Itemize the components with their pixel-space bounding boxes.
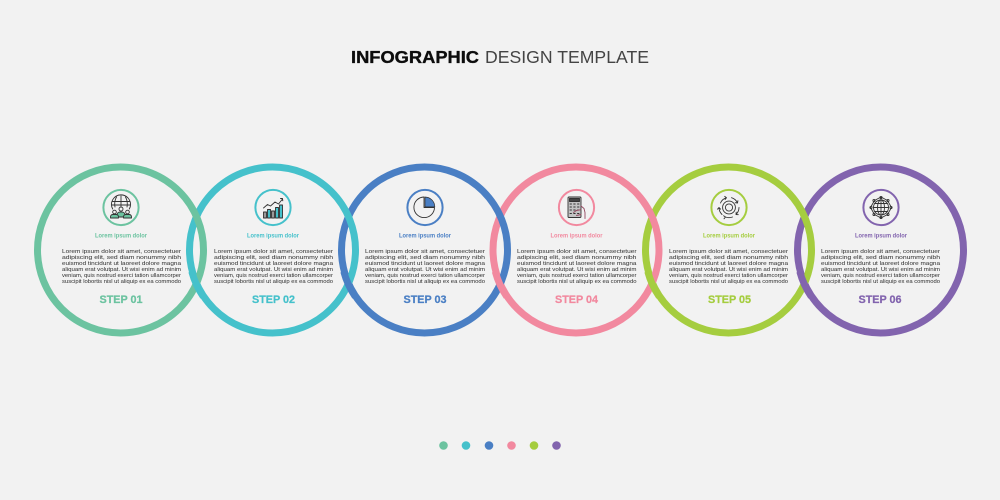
- label: step 04: Lorem ipsum dolor: [550, 234, 603, 240]
- text block: step 05: Lorem ipsum dolor sit amet, consectetuer: [669, 249, 788, 255]
- ring interlace overlaps at lower crossings: [192, 272, 811, 297]
- panel: step 05: [646, 167, 812, 333]
- text block: step 01: euismod tincidunt ut laoreet dolore magna: [62, 261, 182, 267]
- text block: step 02: suscipit lobortis nisl ut aliquip ex ea commodo: [214, 279, 333, 285]
- icon: gear cycle: [711, 190, 747, 225]
- step label: step 04: STEP 04: [555, 294, 599, 306]
- ring: step 04: [493, 167, 659, 333]
- title: [351, 47, 649, 67]
- text block: step 01: adipiscing elit, sed diam nonummy nibh: [62, 255, 181, 261]
- title: INFOGRAPHIC: [351, 47, 479, 67]
- ring: step 01: [38, 167, 204, 333]
- text block: step 03: aliquam erat volutpat. Ut wisi enim ad minim: [365, 267, 485, 273]
- label: step 03: Lorem ipsum dolor: [399, 234, 452, 240]
- text block: step 02: adipiscing elit, sed diam nonummy nibh: [214, 255, 333, 261]
- text block: step 03: euismod tincidunt ut laoreet dolore magna: [365, 261, 486, 267]
- text block: step 01: suscipit lobortis nisl ut aliquip ex ea commodo: [62, 279, 181, 285]
- icon: calculator in hand: [559, 190, 594, 225]
- step label: step 01: STEP 01: [100, 294, 142, 306]
- text block: step 03: veniam, quis nostrud exerci tation ullamcorper: [365, 273, 485, 279]
- text block: step 04: [517, 249, 637, 285]
- panel: step 03: [342, 167, 508, 333]
- panel: step 04: [493, 167, 659, 333]
- text block: step 03: adipiscing elit, sed diam nonummy nibh: [365, 255, 485, 261]
- label: step 05: Lorem ipsum dolor: [703, 234, 756, 240]
- text block: step 06: adipiscing elit, sed diam nonummy nibh: [821, 255, 940, 261]
- ring: step 02: [190, 167, 356, 333]
- title: DESIGN TEMPLATE: [485, 47, 649, 67]
- ring: step 03: [342, 167, 508, 333]
- icon: globe with people: [103, 190, 139, 225]
- text block: step 02: aliquam erat volutpat. Ut wisi enim ad minim: [214, 267, 333, 273]
- step label: step 06: STEP 06: [858, 294, 902, 306]
- text block: step 06: Lorem ipsum dolor sit amet, consectetuer: [821, 249, 940, 255]
- pagination dots: [439, 441, 561, 450]
- icon: growth bar chart: [255, 190, 291, 225]
- text block: step 01: [62, 249, 182, 285]
- ring: step 05: [646, 167, 812, 333]
- text block: step 05: euismod tincidunt ut laoreet dolore magna: [669, 261, 789, 267]
- label: step 02: Lorem ipsum dolor: [247, 234, 300, 240]
- panel: step 01: [38, 167, 204, 333]
- text block: step 03: Lorem ipsum dolor sit amet, consectetuer: [365, 249, 485, 255]
- text block: step 06: aliquam erat volutpat. Ut wisi enim ad minim: [821, 267, 940, 273]
- text block: step 05: adipiscing elit, sed diam nonummy nibh: [669, 255, 788, 261]
- step label: step 03: STEP 03: [404, 294, 446, 306]
- text block: step 05: [669, 249, 789, 285]
- text block: step 02: [214, 249, 334, 285]
- ring: step 06: [798, 167, 964, 333]
- text block: step 02: Lorem ipsum dolor sit amet, consectetuer: [214, 249, 333, 255]
- text block: step 01: Lorem ipsum dolor sit amet, consectetuer: [62, 249, 181, 255]
- text block: step 06: veniam, quis nostrud exerci tation ullamcorper: [821, 273, 940, 279]
- label: step 01: Lorem ipsum dolor: [95, 234, 148, 240]
- text block: step 06: suscipit lobortis nisl ut aliquip ex ea commodo: [821, 279, 940, 285]
- text block: step 01: veniam, quis nostrud exerci tation ullamcorper: [62, 273, 181, 279]
- icon: network globe: [863, 190, 899, 225]
- text block: step 04: euismod tincidunt ut laoreet dolore magna: [517, 261, 637, 267]
- text block: step 05: suscipit lobortis nisl ut aliquip ex ea commodo: [669, 279, 788, 285]
- text block: step 05: aliquam erat volutpat. Ut wisi enim ad minim: [669, 267, 788, 273]
- text block: step 04: adipiscing elit, sed diam nonummy nibh: [517, 255, 636, 261]
- text block: step 03: [365, 249, 486, 285]
- panel: step 02: [190, 167, 356, 333]
- text block: step 04: aliquam erat volutpat. Ut wisi enim ad minim: [517, 267, 637, 273]
- text block: step 06: euismod tincidunt ut laoreet dolore magna: [821, 261, 941, 267]
- text block: step 01: aliquam erat volutpat. Ut wisi enim ad minim: [62, 267, 181, 273]
- step label: step 05: STEP 05: [708, 294, 751, 306]
- icon: pie chart: [407, 190, 443, 225]
- text block: step 02: veniam, quis nostrud exerci tation ullamcorper: [214, 273, 333, 279]
- text block: step 06: [821, 249, 941, 285]
- label: step 06: Lorem ipsum dolor: [855, 234, 908, 240]
- text block: step 02: euismod tincidunt ut laoreet dolore magna: [214, 261, 334, 267]
- panel: step 06: [798, 167, 964, 333]
- text block: step 04: suscipit lobortis nisl ut aliquip ex ea commodo: [517, 279, 636, 285]
- text block: step 04: veniam, quis nostrud exerci tation ullamcorper: [517, 273, 637, 279]
- text block: step 05: veniam, quis nostrud exerci tation ullamcorper: [669, 273, 788, 279]
- step label: step 02: STEP 02: [252, 294, 295, 306]
- text block: step 04: Lorem ipsum dolor sit amet, consectetuer: [517, 249, 637, 255]
- text block: step 03: suscipit lobortis nisl ut aliquip ex ea commodo: [365, 279, 485, 285]
